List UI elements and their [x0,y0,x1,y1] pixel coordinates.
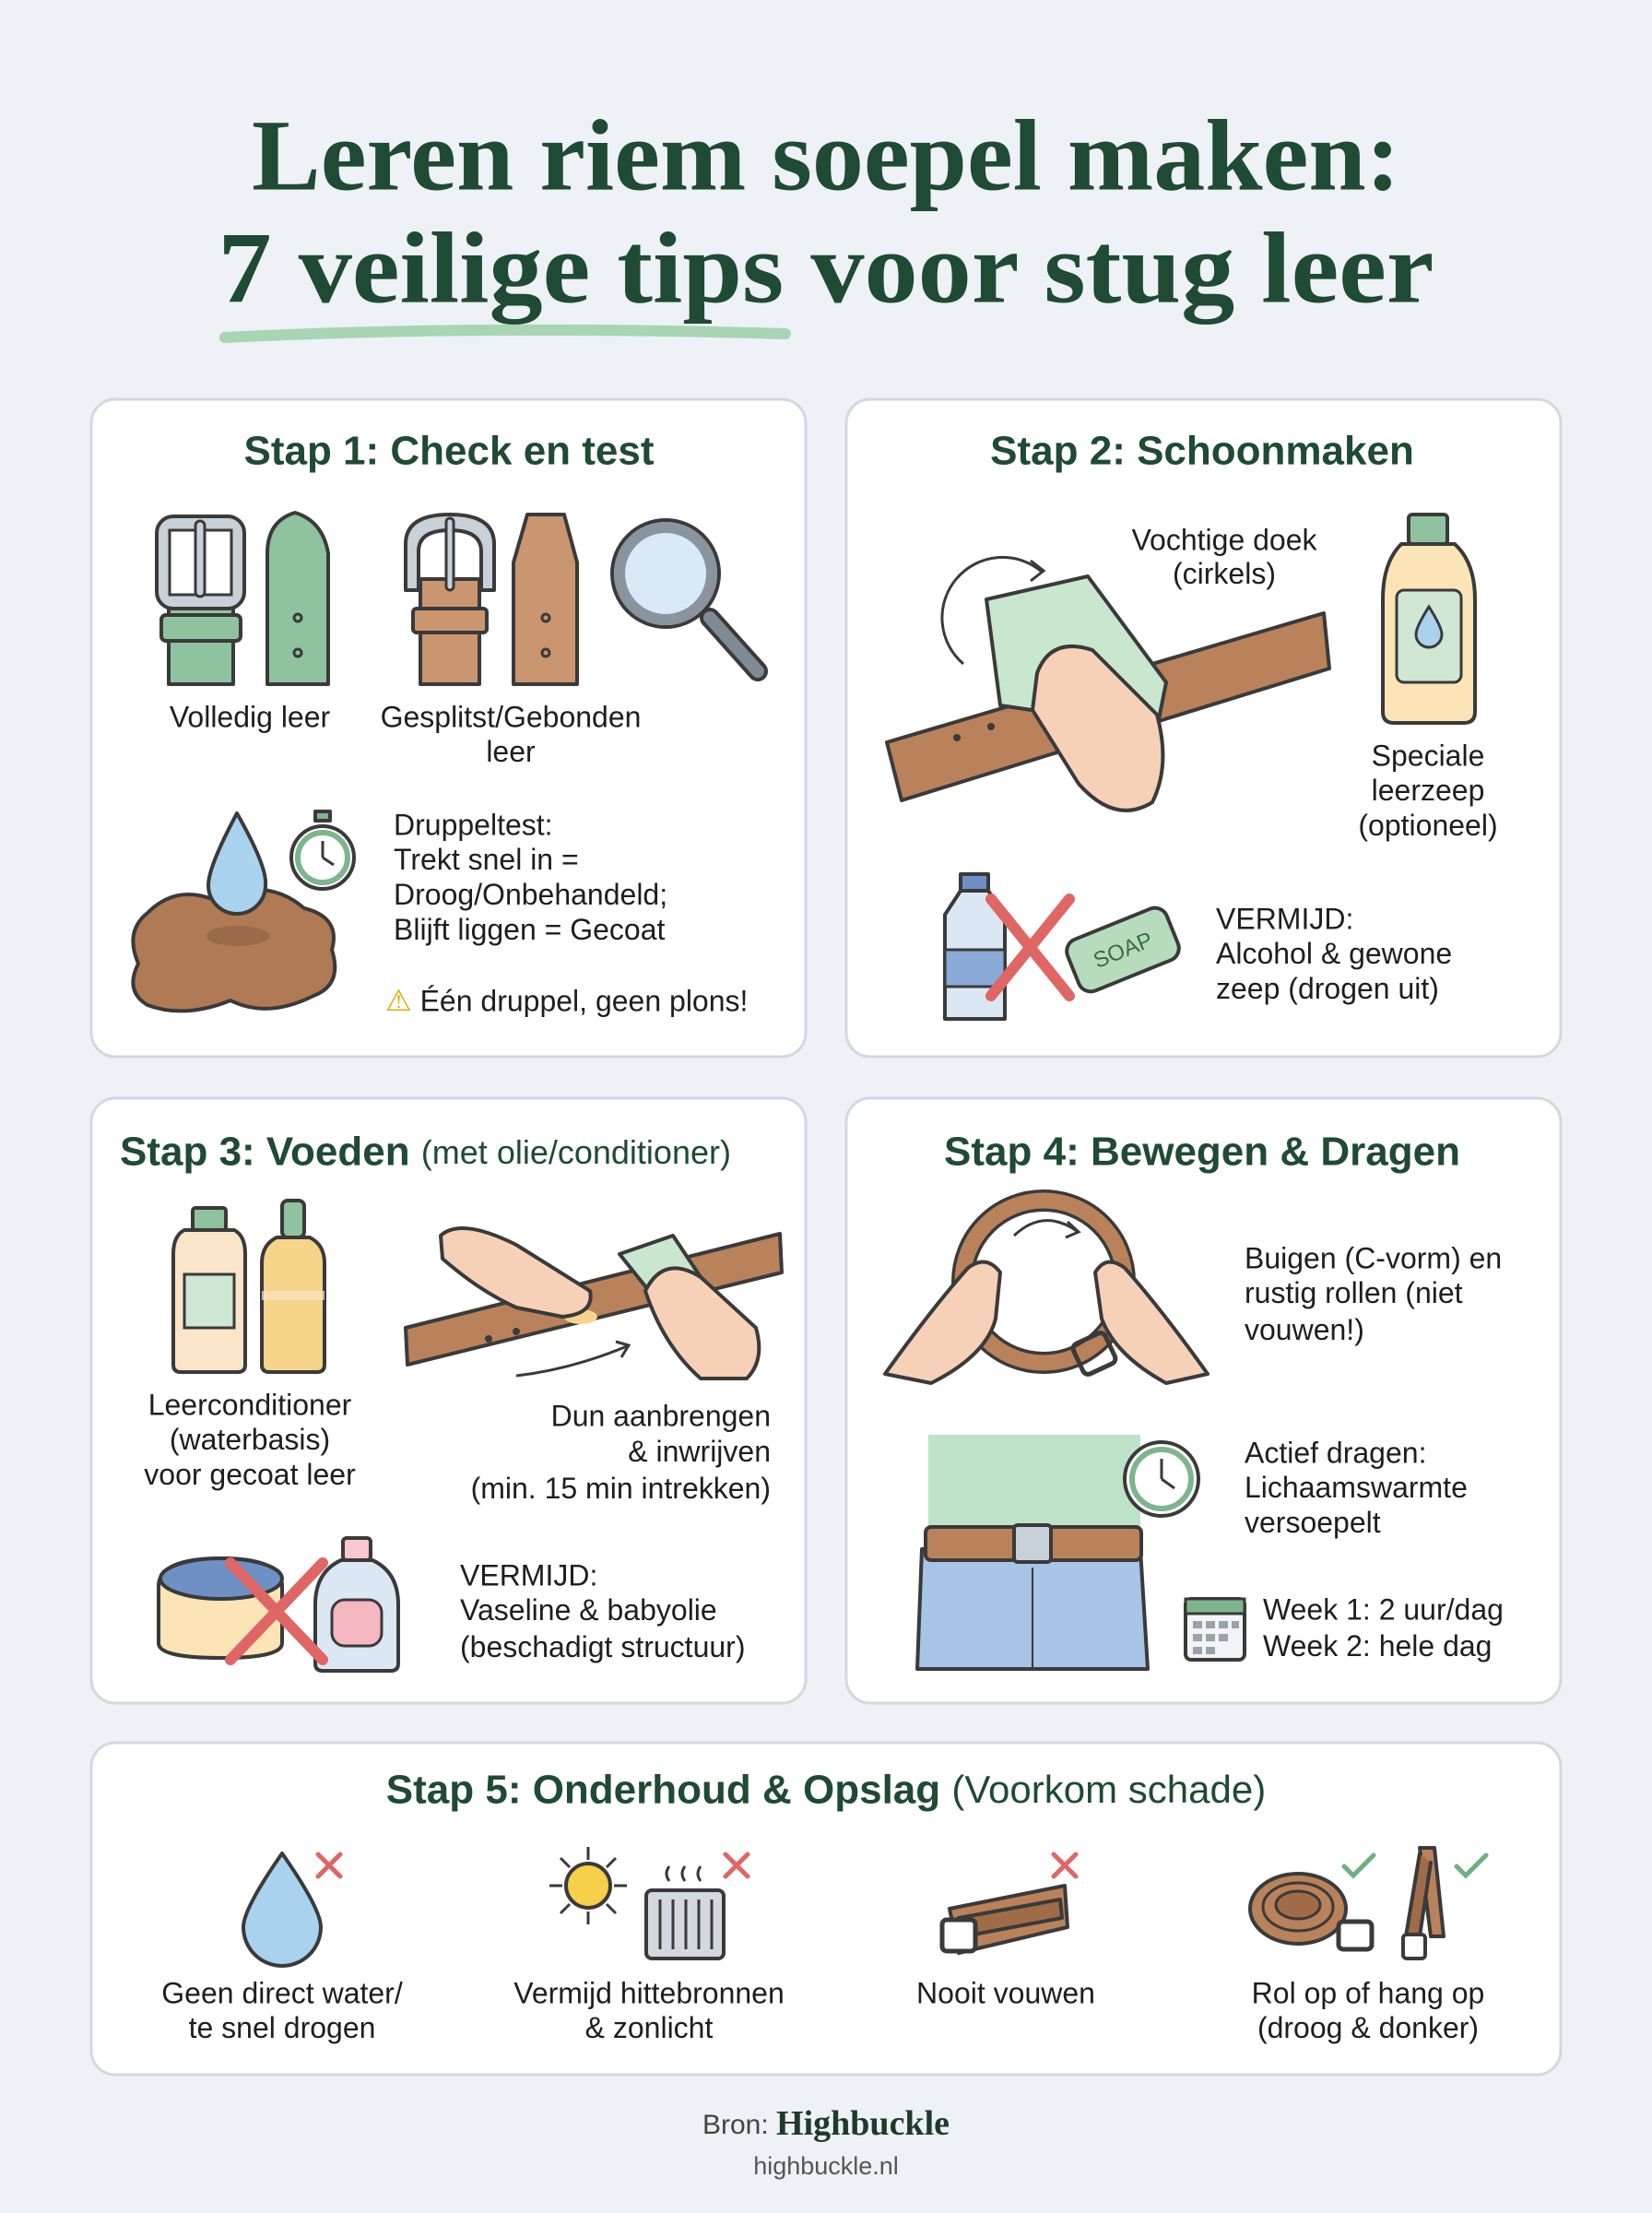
text: dun aanbrengen: (min. 15 min intrekken) [471,1472,771,1505]
icon: avoid vaseline & baby oil [159,1538,398,1671]
label: speciale leerzeep: Speciale [1372,739,1484,772]
icon: conditioner bottles [173,1201,324,1372]
title: 7 veilige tips voor stug leer [218,211,1434,324]
warning: ⚠ Één druppel, geen plons! [385,984,748,1017]
label: vochtige doek: (cirkels) [1173,557,1276,590]
illustration: bending belt [885,1201,1208,1383]
label: water: Geen direct water/ [161,1976,403,2009]
panel: stap 4 [846,1098,1561,1703]
panel: stap 5 [91,1743,1561,2075]
text: druppeltest: Trekt snel in = [394,843,579,876]
panel: stap 3 [91,1098,806,1703]
footer: url: highbuckle.nl [753,2152,899,2180]
label: gesplitst: Gesplitst/Gebonden [381,700,641,733]
text: vermijd: Alcohol & gewone [1216,937,1452,970]
text: vermijd vaseline: VERMIJD: [460,1558,597,1592]
text: actief dragen: Actief dragen: [1245,1436,1426,1469]
text: vermijd vaseline: Vaseline & babyolie [460,1593,717,1627]
text: buigen: Buigen (C-vorm) en [1245,1241,1502,1274]
label: leerconditioner: (waterbasis) [170,1423,330,1456]
heading: stap 2: Stap 2: Schoonmaken [990,429,1414,474]
text: druppeltest: Druppeltest: [394,808,553,841]
text: vermijd: zeep (drogen uit) [1216,972,1439,1005]
label: leerconditioner: voor gecoat leer [144,1458,356,1491]
icon: water drop no [243,1853,340,1966]
text: buigen: vouwen!) [1245,1313,1364,1346]
icon: calendar [1186,1599,1245,1660]
text: week schedule: Week 1: 2 uur/dag [1263,1592,1504,1626]
panel: stap 1 [91,399,806,1057]
label: vochtige doek: Vochtige doek [1131,523,1317,556]
title [218,99,1434,337]
heading: stap 3: Stap 3: Voeden (met olie/conditioner) [120,1130,731,1175]
icon: sun and radiator no [549,1847,748,1959]
text: druppeltest: Droog/Onbehandeld; [394,878,667,911]
label: speciale leerzeep: leerzeep [1372,774,1484,807]
heading: stap 5: Stap 5: Onderhoud & Opslag (Voorkom schade) [386,1768,1266,1813]
icon: split leather belt [406,515,577,684]
label: nooit vouwen: Nooit vouwen [916,1976,1095,2009]
text: week schedule: Week 2: hele dag [1263,1629,1492,1663]
icon: leather hide with drop [133,811,354,1011]
label: volledig leer: Volledig leer [170,700,331,733]
label: gesplitst: leer [486,735,536,768]
icon: folded belt no [942,1854,1076,1953]
text: vermijd: VERMIJD: [1216,902,1353,935]
text: actief dragen: Lichaamswarmte [1245,1471,1468,1504]
label: leerconditioner: Leerconditioner [148,1388,351,1421]
text: buigen: rustig rollen (niet [1245,1276,1463,1309]
icon: soap bottle [1383,515,1475,723]
icon: magnifier [612,520,758,671]
illustration: applying oil [406,1228,782,1379]
icon: full leather belt [157,513,328,684]
label: hittebronnen: Vermijd hittebronnen [513,1976,785,2009]
footer: source: Bron: Highbuckle [702,2104,950,2143]
text: actief dragen: versoepelt [1245,1506,1381,1539]
heading: stap 4: Stap 4: Bewegen & Dragen [944,1130,1460,1175]
panel: stap 2 [846,399,1561,1057]
text: druppeltest: Blijft liggen = Gecoat [394,913,666,946]
icon: rolled and hanging belt ok [1250,1848,1486,1959]
label: rol op: (droog & donker) [1257,2011,1479,2044]
illustration: wearing belt [917,1435,1198,1669]
label: hittebronnen: & zonlicht [585,2011,713,2044]
label: water: te snel drogen [189,2011,375,2044]
title: Leren riem soepel maken: [252,99,1400,211]
label: speciale leerzeep: (optioneel) [1358,809,1498,842]
text: dun aanbrengen: Dun aanbrengen [551,1399,771,1432]
illustration: cleaning belt [887,557,1329,811]
icon: avoid alcohol and soap [945,874,1183,1019]
label: rol op: Rol op of hang op [1252,1976,1484,2009]
heading: stap 1: Stap 1: Check en test [243,429,655,474]
text: dun aanbrengen: & inwrijven [628,1435,771,1468]
icon: avoid alcohol and soap: SOAP [1090,928,1156,974]
text: vermijd vaseline: (beschadigt structuur) [460,1630,745,1663]
